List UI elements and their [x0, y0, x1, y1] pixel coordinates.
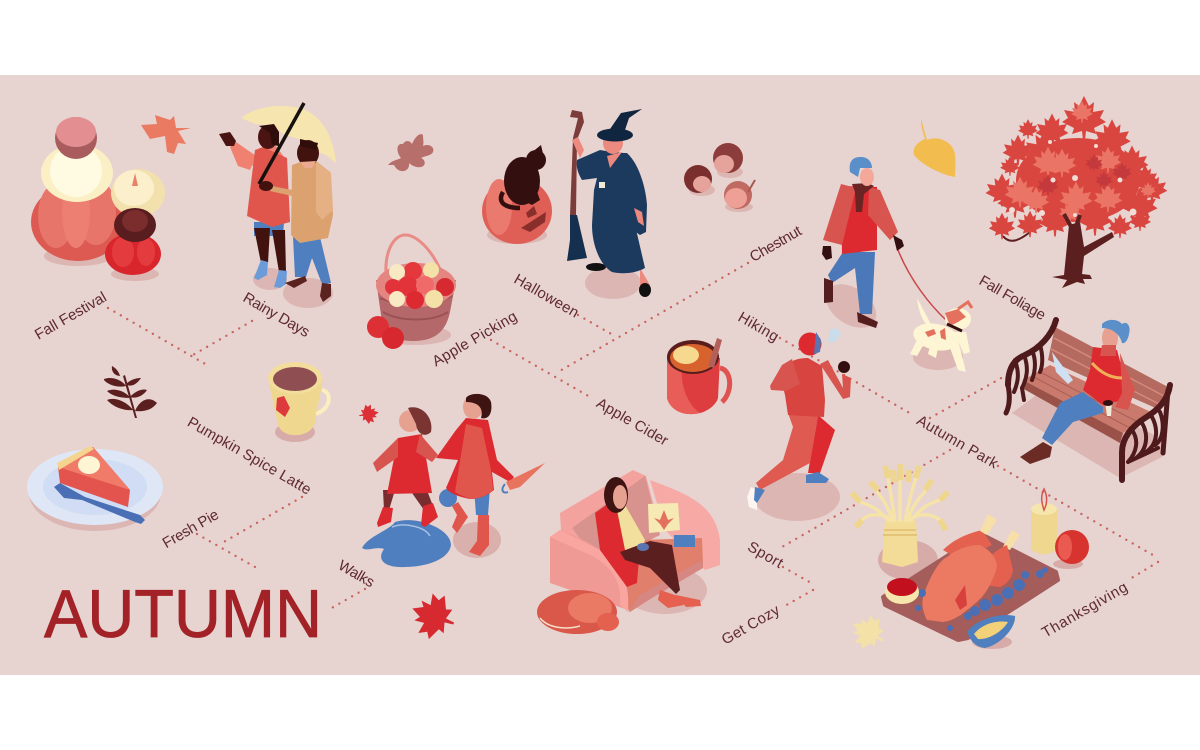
- illustration: mother and daughter walking: [362, 394, 545, 567]
- icon: red maple leaf: [404, 587, 462, 645]
- label: Get Cozy: Get Cozy: [719, 601, 783, 648]
- icon: small red leaf: [358, 403, 380, 425]
- label: Fall Foliage: Fall Foliage: [976, 272, 1049, 324]
- label: Fresh Pie: Fresh Pie: [160, 506, 222, 552]
- icon: orange leaf: [141, 115, 191, 154]
- illustration: coffee latte cup: [268, 362, 329, 442]
- label: Pumpkin Spice Latte: Pumpkin Spice Latte: [184, 414, 314, 498]
- illustration: sofa and woman with sleeping dog: [537, 470, 720, 634]
- illustration: couple under umbrella: [219, 103, 336, 308]
- icon: dark sprig: [104, 366, 157, 418]
- label: Thanksgiving: Thanksgiving: [1039, 579, 1131, 641]
- label: Hiking: Hiking: [735, 309, 782, 345]
- illustration: witch with broom: [567, 109, 651, 299]
- label: Rainy Days: Rainy Days: [240, 289, 313, 341]
- illustration: man walking dog: [818, 157, 972, 372]
- icon: pale leaf: [844, 608, 892, 656]
- label: Chestnut: Chestnut: [747, 222, 805, 266]
- illustration: park bench with woman: [1006, 320, 1170, 480]
- illustration: apple basket: [367, 235, 456, 349]
- illustration: cider mug: [667, 338, 730, 414]
- illustration: red maple tree: [986, 96, 1167, 288]
- illustration: runner: [747, 328, 851, 521]
- illustration: stacked pumpkins: [31, 117, 165, 281]
- illustration: pie slice on plate: [27, 446, 163, 531]
- label: Autumn Park: Autumn Park: [914, 412, 1001, 472]
- label: Sport: Sport: [745, 538, 787, 572]
- label: Apple Cider: Apple Cider: [593, 395, 671, 449]
- label: Walks: Walks: [335, 557, 377, 591]
- illustration: wheat sheaf: [852, 464, 948, 580]
- illustration: chestnuts: [684, 143, 755, 212]
- icon: yellow leaf: [914, 119, 955, 177]
- label: Halloween: Halloween: [511, 271, 582, 321]
- label: Fall Festival: Fall Festival: [32, 289, 110, 343]
- illustration: thanksgiving platter: [883, 489, 1089, 649]
- label: Apple Picking: Apple Picking: [429, 308, 520, 370]
- icon: brown oak leaf: [388, 134, 433, 171]
- illustration: cat on jack-o-lantern: [482, 145, 552, 244]
- background panel: [0, 75, 1200, 675]
- title: AUTUMN: [44, 576, 322, 652]
